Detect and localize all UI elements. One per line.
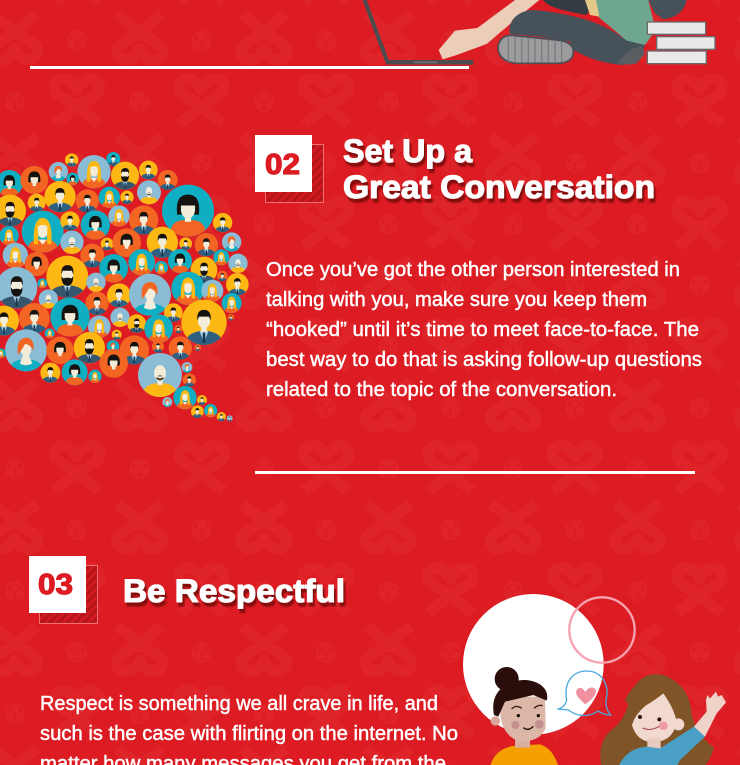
number badge 03 [29, 556, 98, 624]
body text 02: related to the topic of the conversation. [266, 379, 617, 401]
chat bubble of avatars [0, 152, 249, 421]
body text 02 [266, 259, 702, 401]
body text 03 [40, 693, 458, 765]
illustration: person with laptop and books [364, 0, 715, 65]
left person [490, 667, 558, 765]
panel: section 03 [29, 556, 726, 765]
body text 03: such is the case with flirting on the internet. No [40, 723, 458, 745]
laptop [364, 0, 473, 65]
number badge 02: 02 [265, 149, 300, 181]
panel: section 02 [0, 133, 702, 421]
heading 03: Be Respectful [123, 573, 345, 609]
speech bubble with heart [557, 671, 611, 715]
heading 02: Great Conversation [343, 169, 655, 205]
right person [600, 674, 726, 765]
body text 02: talking with you, make sure you keep them [266, 289, 647, 311]
number badge 03: 03 [38, 569, 73, 601]
number badge 02 [255, 135, 324, 202]
heading 02: Set Up a [343, 133, 472, 169]
books [647, 22, 715, 64]
body text 02: Once you’ve got the other person interested in [266, 259, 680, 281]
illustration: two people chatting [463, 594, 726, 765]
body text 02: best way to do that is asking follow-up questions [266, 349, 702, 371]
person [439, 0, 687, 65]
body text 03: Respect is something we all crave in life, and [40, 693, 438, 715]
heading 02 [343, 133, 655, 205]
body text 02: “hooked” until it’s time to meet face-to-face. The [266, 319, 699, 341]
